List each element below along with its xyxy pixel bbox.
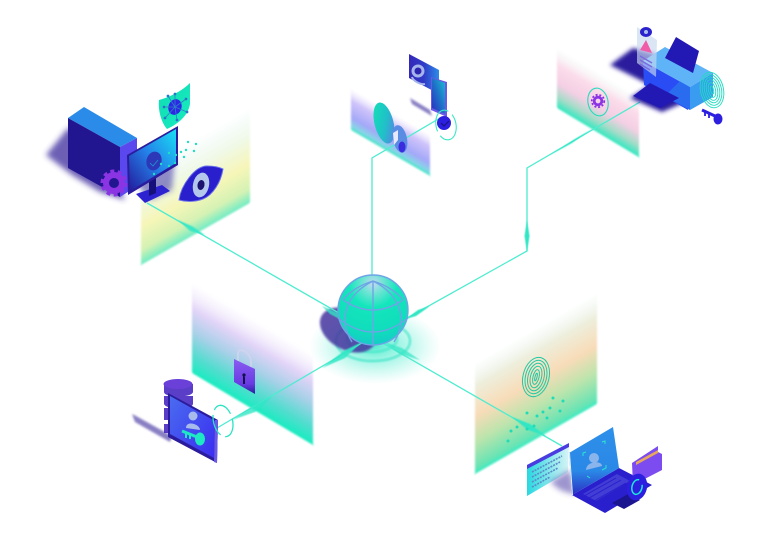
panel: lower-right fingerprint plane [475,292,597,474]
icon: database cylinders [164,379,193,433]
panel: top-right gear plane [557,46,639,157]
icon: code window [527,443,569,496]
icon: monitor [127,126,178,203]
panel: top-left eye plane [141,107,250,265]
icon: gear in ring [585,86,611,118]
connector flares [178,129,592,436]
icon: transparent alert document [637,27,657,77]
panel: top-centre identity plane [351,88,430,176]
icon: ID card [409,54,439,116]
globe ground glow [309,308,441,384]
icon: desktop tower [46,107,137,200]
icon: printer key [702,110,722,124]
icon: tablet with key [132,393,218,463]
icon: refresh badge [624,471,650,503]
icon: laptop [550,427,652,513]
globe shadow [312,298,384,362]
icon: data dots [153,141,197,175]
icon: fingerprint data dots [506,396,564,442]
icon: check ring [433,108,459,142]
globe [338,275,408,345]
icon: rotation ring [210,403,236,439]
icon: phone [431,77,447,117]
icon: leaf fingerprint shape [370,100,410,154]
icon: eye [179,166,223,201]
panel: lower-left lock plane [192,281,313,445]
icon: folder [632,446,662,485]
icon: printer [610,37,713,112]
connector lines [147,102,640,446]
icon: printer fingerprint [697,70,727,110]
icon: gear [102,171,126,195]
icon: padlock [234,350,255,394]
icon: virus shield [159,83,190,129]
icon: large fingerprint [519,354,553,400]
